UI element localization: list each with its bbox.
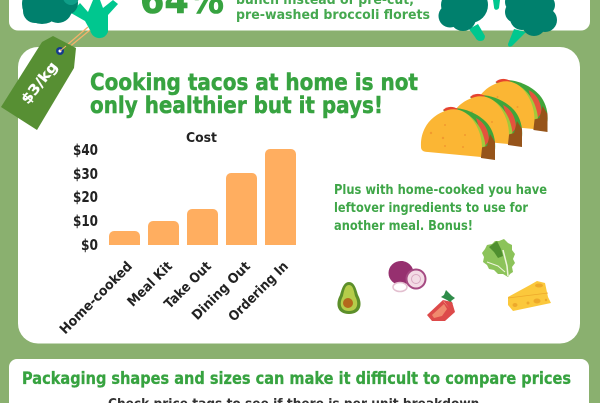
icon: tomato bbox=[427, 290, 455, 321]
heading: tacos bbox=[90, 70, 418, 119]
heading: tacos: Cooking tacos at home is not bbox=[90, 70, 418, 96]
x axis labels: Meal Kit bbox=[124, 258, 176, 310]
x axis labels bbox=[57, 258, 292, 338]
y axis labels bbox=[73, 141, 98, 254]
panel: packaging card bbox=[9, 359, 589, 403]
price tag bbox=[1, 27, 90, 130]
chart title: Cost bbox=[186, 130, 218, 146]
panel: top card bbox=[9, 0, 590, 30]
icon: cheese bbox=[508, 281, 551, 311]
x axis labels: Dining Out bbox=[189, 258, 254, 324]
bar chart: cost bbox=[57, 130, 296, 338]
x axis labels: Take Out bbox=[161, 258, 215, 312]
icon: red onion bbox=[388, 261, 426, 292]
y axis labels: $40 bbox=[73, 141, 98, 159]
text: leftovers note: another meal. Bonus! bbox=[334, 219, 473, 234]
x axis labels: Ordering In bbox=[225, 259, 292, 325]
top card text bbox=[236, 0, 430, 23]
icon: broccoli right bbox=[438, 0, 557, 47]
icon: avocado bbox=[337, 282, 361, 314]
price tag: $3/kg bbox=[19, 59, 61, 107]
top card text: pre-washed broccoli florets bbox=[236, 7, 430, 23]
y axis labels: $0 bbox=[81, 236, 98, 254]
icon: tacos bbox=[421, 79, 548, 160]
icon: broccoli left bbox=[22, 0, 118, 38]
heading: tacos: only healthier but it pays! bbox=[90, 93, 383, 119]
x axis labels: Home-cooked bbox=[57, 259, 136, 338]
bars bbox=[109, 149, 296, 245]
y axis labels: $30 bbox=[73, 165, 98, 183]
y axis labels: $10 bbox=[73, 212, 98, 230]
text: leftovers note bbox=[334, 183, 547, 234]
y axis labels: $20 bbox=[73, 188, 98, 206]
icon: lettuce bbox=[482, 239, 515, 277]
panel: tacos main card bbox=[18, 47, 580, 344]
text: leftovers note: leftover ingredients to use for bbox=[334, 201, 529, 216]
text: leftovers note: Plus with home-cooked you have bbox=[334, 183, 547, 198]
